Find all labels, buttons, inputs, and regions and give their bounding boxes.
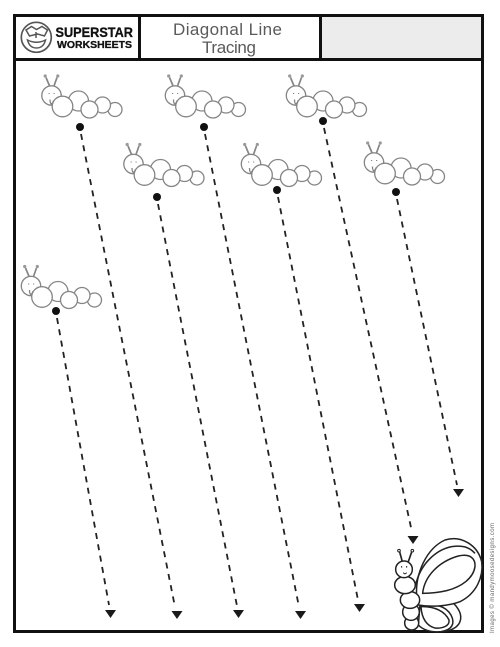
title: Tracing [202, 38, 256, 57]
header: grey box [322, 17, 482, 58]
caterpillar row one: right [286, 74, 366, 118]
butterfly [395, 539, 482, 632]
title: Diagonal Line [173, 20, 282, 39]
caterpillar row one: left [42, 74, 122, 118]
tracing lines with start dots [52, 117, 400, 315]
title [173, 20, 282, 57]
caterpillar row two: right [364, 141, 444, 185]
logo: Superstar Worksheets [21, 22, 133, 52]
image credit: Images © mandymoosedesigns.com [489, 523, 496, 633]
dashed diagonal lines [57, 128, 457, 607]
caterpillar row two: middle [241, 143, 322, 186]
caterpillar row one: middle [165, 74, 246, 118]
caterpillar row two: left [124, 143, 204, 186]
arrowheads [105, 489, 464, 619]
caterpillar far left [21, 265, 101, 308]
logo: Superstar Worksheets: SUPERSTAR [56, 25, 133, 40]
logo: Superstar Worksheets: WORKSHEETS [57, 40, 132, 51]
